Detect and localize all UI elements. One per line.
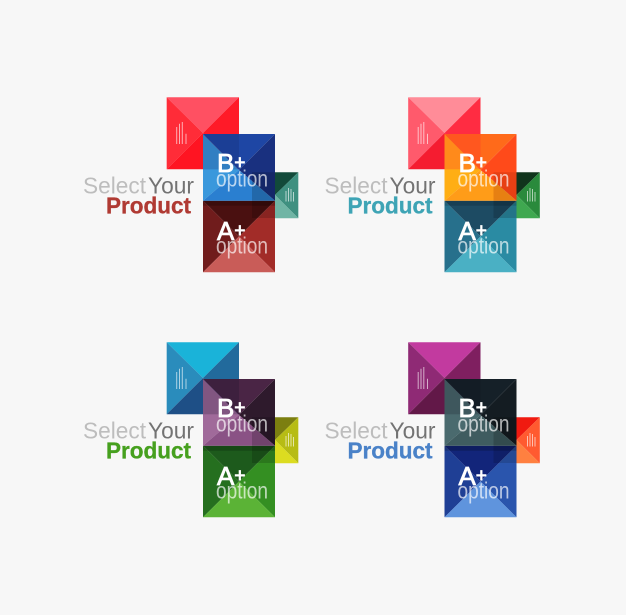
panel: B+ square: + xyxy=(234,397,246,419)
panel: B+ square: option xyxy=(216,411,268,437)
icon: small side square with bars xyxy=(275,172,298,218)
panel: B+ square: B xyxy=(458,148,476,178)
panel: B+ square xyxy=(444,134,516,201)
heading: select your product: Select xyxy=(83,172,147,198)
heading: select your product xyxy=(83,417,194,464)
panel: A+ square xyxy=(444,446,516,517)
panel: B+ square: option xyxy=(458,411,510,437)
panel: B+ square: + xyxy=(476,152,487,174)
panel: B+ square: B xyxy=(217,148,234,178)
panel: B+ square: + xyxy=(476,397,487,419)
heading: select your product: Your xyxy=(148,417,194,443)
heading: select your product: Product xyxy=(106,438,191,464)
heading: select your product: Your xyxy=(390,172,436,198)
heading: select your product xyxy=(324,417,436,464)
panel: A+ square: + xyxy=(234,220,246,242)
icon: small side square with bars xyxy=(516,417,540,463)
heading: select your product xyxy=(324,172,436,218)
panel: green product option group xyxy=(83,342,298,517)
panel: B+ square: B xyxy=(458,393,476,423)
panel: A+ square: option xyxy=(458,477,510,503)
heading: select your product: Your xyxy=(390,417,436,443)
panel: A+ square: A xyxy=(458,461,476,491)
panel: A+ square: option xyxy=(216,477,268,503)
panel: A+ square: A xyxy=(458,216,476,246)
panel: A+ square xyxy=(444,201,516,272)
panel: A+ square: + xyxy=(476,220,487,242)
panel: A+ square: A xyxy=(217,461,235,491)
icon: top square with bars xyxy=(408,97,480,169)
panel: A+ square: + xyxy=(476,465,487,487)
icon: top square with bars xyxy=(167,97,239,169)
panel: B+ square: + xyxy=(234,152,246,174)
panel: A+ square xyxy=(203,446,275,517)
panel: B+ square: B xyxy=(217,393,234,423)
heading: select your product: Product xyxy=(348,192,433,218)
panel: A+ square: option xyxy=(458,232,510,258)
panel: A+ square xyxy=(203,201,275,272)
icon: small side square with bars xyxy=(516,172,540,218)
heading: select your product: Select xyxy=(324,172,388,198)
icon: small side square with bars xyxy=(275,417,298,463)
panel: B+ square xyxy=(203,379,275,446)
panel: B+ square xyxy=(203,134,275,201)
panel: B+ square: option xyxy=(216,166,268,192)
panel: A+ square: + xyxy=(234,465,246,487)
icon: top square with bars xyxy=(167,342,239,414)
panel: red product option group xyxy=(83,97,298,272)
panel: B+ square xyxy=(444,379,516,446)
heading: select your product xyxy=(83,172,194,218)
panel: A+ square: option xyxy=(216,232,268,258)
heading: select your product: Product xyxy=(106,192,191,218)
panel: orange product option group xyxy=(324,97,540,272)
panel: A+ square: A xyxy=(217,216,235,246)
heading: select your product: Your xyxy=(148,172,194,198)
heading: select your product: Select xyxy=(83,417,147,443)
heading: select your product: Select xyxy=(324,417,388,443)
panel: B+ square: option xyxy=(458,166,510,192)
heading: select your product: Product xyxy=(348,438,433,464)
panel: blue product option group xyxy=(324,342,540,517)
icon: top square with bars xyxy=(408,342,480,414)
